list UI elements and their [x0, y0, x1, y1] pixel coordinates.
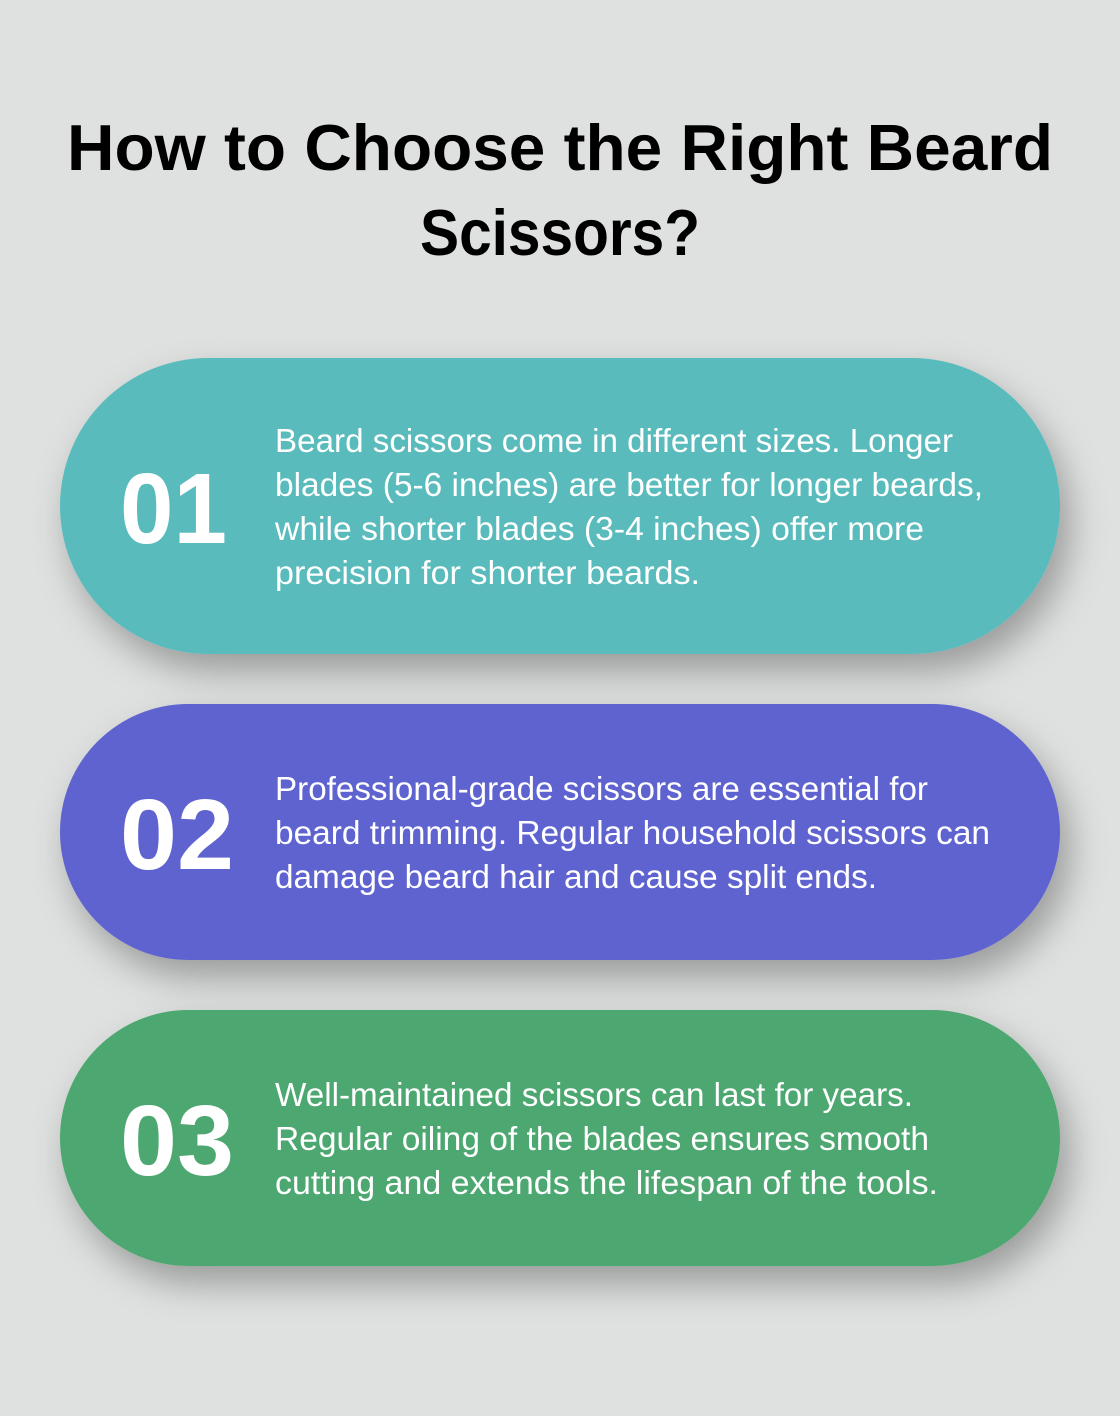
- text block 03: [275, 1076, 938, 1201]
- panel: step 02: [60, 704, 1060, 960]
- panel: step 01: [60, 358, 1060, 654]
- panel: step 03: [60, 1010, 1060, 1266]
- text block 01: while shorter blades (3-4 inches) offer more: [274, 510, 924, 547]
- title: [67, 111, 1053, 269]
- text block 03: cutting and extends the lifespan of the tools.: [275, 1164, 938, 1201]
- text block 01: precision for shorter beards.: [275, 554, 700, 591]
- text block 01: [274, 422, 983, 591]
- title: How to Choose the Right Beard: [67, 111, 1053, 184]
- title: Scissors?: [420, 196, 700, 269]
- number 03: 03: [120, 1085, 234, 1197]
- text block 02: damage beard hair and cause split ends.: [275, 858, 877, 895]
- text block 01: Beard scissors come in different sizes. Longer: [275, 422, 953, 459]
- text block 02: beard trimming. Regular household scissors can: [275, 814, 990, 851]
- card background 03: [60, 1010, 1060, 1266]
- card background 01: [60, 358, 1060, 654]
- text block 02: Professional-grade scissors are essential for: [275, 770, 928, 807]
- text block 03: Regular oiling of the blades ensures smooth: [275, 1120, 929, 1157]
- number 02: 02: [120, 779, 234, 891]
- text block 02: [275, 770, 990, 895]
- text block 01: blades (5-6 inches) are better for longer beards,: [275, 466, 983, 503]
- number 01: 01: [120, 453, 227, 565]
- card background 02: [60, 704, 1060, 960]
- text block 03: Well-maintained scissors can last for years.: [275, 1076, 913, 1113]
